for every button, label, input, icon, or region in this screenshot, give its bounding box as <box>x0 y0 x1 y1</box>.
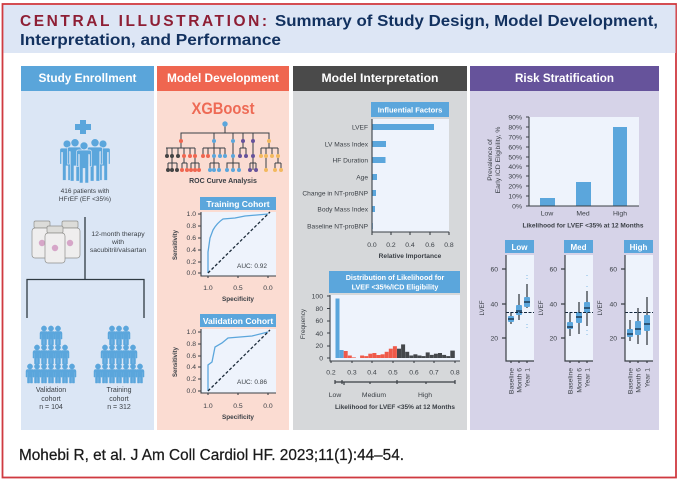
chart: influential factors: 0.8 <box>444 242 454 249</box>
chart: training cohort ROC: 0.5 <box>233 285 243 292</box>
chart: distribution of likelihood: Distribution of Likelihood for <box>346 273 445 282</box>
chart: distribution of likelihood: Frequency <box>300 308 307 339</box>
validation cohort label: cohort <box>41 396 61 403</box>
chart: influential factors: 0.2 <box>386 242 396 249</box>
chart: validation cohort ROC: AUC: 0.86 <box>237 379 267 386</box>
chart: prevalence of early ICD eligibility: Early ICD Eligibility, % <box>495 127 502 193</box>
chart: influential factors: LVEF <box>352 124 368 132</box>
chart: validation cohort ROC: 0.6 <box>187 353 196 360</box>
citation: Mohebi R, et al. J Am Coll Cardiol HF. 2023;11(1):44–54. <box>19 447 404 464</box>
chart: influential factors: LV Mass Index <box>325 142 369 148</box>
icon: pill bottles <box>32 221 80 263</box>
chart: medium group LVEF boxplot: 20 <box>549 336 557 342</box>
chart: distribution of likelihood: 0.3 <box>347 370 357 376</box>
XGBoost heading: XGBoost <box>192 99 255 118</box>
chart: distribution of likelihood: 0 <box>319 356 323 362</box>
chart: prevalence of early ICD eligibility: Med <box>576 210 590 218</box>
chart: influential factors: 0.4 <box>405 242 415 249</box>
title banner: Summary of Study Design, Model Development, <box>275 13 658 30</box>
chart: prevalence of early ICD eligibility: 90% <box>508 114 522 122</box>
chart: high group LVEF boxplot: 40 <box>609 302 617 308</box>
chart: validation cohort ROC: 1.0 <box>203 403 213 410</box>
chart: distribution of likelihood: 20 <box>315 343 323 350</box>
chart: high group LVEF boxplot: High <box>630 243 647 252</box>
chart: distribution of likelihood: 0.6 <box>409 370 419 376</box>
chart: distribution of likelihood: 80 <box>315 306 323 313</box>
chart: training cohort ROC: AUC: 0.92 <box>237 263 267 270</box>
icon: validation cohort people <box>26 326 76 383</box>
chart: prevalence of early ICD eligibility: 10% <box>508 194 522 200</box>
chart: medium group LVEF boxplot: Year 1 <box>584 368 592 387</box>
chart: training cohort ROC: 0.6 <box>187 235 196 242</box>
chart: low group LVEF boxplot: Month 6 <box>516 368 524 393</box>
chart: prevalence of early ICD eligibility: 50% <box>508 154 522 162</box>
chart: distribution of likelihood: 0.2 <box>326 370 336 376</box>
chart: influential factors: 0.0 <box>367 242 377 249</box>
therapy text: 12-month therapy <box>91 231 145 238</box>
chart: validation cohort ROC: 0.8 <box>187 341 196 348</box>
title banner: Interpretation, and Performance <box>20 32 281 49</box>
title banner: CENTRAL ILLUSTRATION: <box>20 13 267 30</box>
chart: low group LVEF boxplot <box>479 240 534 394</box>
chart: distribution of likelihood: 60 <box>315 318 323 325</box>
chart: low group LVEF boxplot: Baseline <box>508 368 516 394</box>
chart: training cohort ROC: 0.4 <box>187 247 196 254</box>
chart: distribution of likelihood: 0.7 <box>429 370 439 376</box>
chart: distribution of likelihood: 0.4 <box>367 370 377 376</box>
chart: low group LVEF boxplot: 20 <box>490 336 498 342</box>
chart: low group LVEF boxplot: Low <box>512 243 528 252</box>
chart: influential factors: Baseline NT-proBNP <box>307 224 369 230</box>
chart: distribution of likelihood: Low <box>329 392 341 399</box>
patient count text: 416 patients with <box>61 188 110 195</box>
chart: prevalence of early ICD eligibility: 70% <box>508 134 522 142</box>
chart: training cohort ROC: Specificity <box>222 296 254 303</box>
ROC heading: ROC Curve Analysis <box>189 178 257 185</box>
chart: validation cohort ROC: 0.0 <box>187 388 196 395</box>
chart: low group LVEF boxplot: Year 1 <box>524 368 532 387</box>
chart: prevalence of early ICD eligibility: 20% <box>508 184 522 190</box>
panel: risk stratification <box>470 66 659 430</box>
chart: validation cohort ROC: 0.5 <box>233 403 243 410</box>
chart: medium group LVEF boxplot: LVEF <box>538 300 545 316</box>
chart: influential factors: Influential Factors <box>378 106 442 114</box>
chart: prevalence of early ICD eligibility: 60% <box>508 144 522 152</box>
training cohort label: n = 312 <box>107 404 131 411</box>
chart: prevalence of early ICD eligibility: 0% <box>512 204 522 210</box>
chart: influential factors: Body Mass Index <box>317 206 369 214</box>
chart: training cohort ROC: Sensitivity <box>173 229 179 260</box>
chart: distribution of likelihood: LVEF <35%/ICD Eligibility <box>352 282 438 292</box>
chart: prevalence of early ICD eligibility: 80% <box>508 124 522 132</box>
chart: validation cohort ROC: Validation Cohort <box>203 316 273 326</box>
chart: high group LVEF boxplot: LVEF <box>597 300 604 316</box>
chart: training cohort ROC: 0.0 <box>187 270 196 277</box>
training cohort label: cohort <box>109 396 129 403</box>
validation cohort label <box>36 387 66 411</box>
chart: prevalence of early ICD eligibility: Likelihood for LVEF <35% at 12 Months <box>522 222 644 230</box>
chart: validation cohort ROC: Specificity <box>222 414 254 421</box>
panel: model interpretation <box>293 66 467 430</box>
chart: training cohort ROC <box>173 197 276 303</box>
chart: training cohort ROC: 0.0 <box>263 285 273 292</box>
chart: prevalence of early ICD eligibility <box>487 114 644 230</box>
chart: validation cohort ROC: Sensitivity <box>173 346 179 377</box>
patient count text <box>59 188 111 203</box>
panel: model development: Model Development <box>167 71 279 85</box>
panel: study enrollment: Study Enrollment <box>38 71 136 85</box>
chart: distribution of likelihood: Likelihood for LVEF <35% at 12 Months <box>335 405 456 411</box>
chart: influential factors: 0.6 <box>425 242 435 249</box>
chart: medium group LVEF boxplot: Med <box>570 243 587 252</box>
icon: patient group <box>60 139 110 183</box>
chart: high group LVEF boxplot: Baseline <box>628 368 634 394</box>
chart: influential factors: HF Duration <box>332 158 368 164</box>
chart: distribution of likelihood: Medium <box>362 392 386 399</box>
chart: high group LVEF boxplot: Year 1 <box>644 368 652 387</box>
validation cohort label: Validation <box>36 387 66 394</box>
chart: low group LVEF boxplot: 60 <box>490 266 498 274</box>
cohort split bracket <box>27 217 144 318</box>
chart: training cohort ROC: Training Cohort <box>206 199 270 209</box>
chart: medium group LVEF boxplot: Baseline <box>568 368 574 394</box>
training cohort label: Training <box>106 387 132 394</box>
chart: distribution of likelihood <box>300 271 460 411</box>
chart: validation cohort ROC: 1.0 <box>187 329 196 336</box>
icon: medical cross <box>75 120 91 134</box>
chart: distribution of likelihood: 40 <box>315 331 323 338</box>
chart: high group LVEF boxplot: Month 6 <box>636 368 642 393</box>
chart: training cohort ROC: 1.0 <box>203 285 213 292</box>
chart: prevalence of early ICD eligibility: 30% <box>508 174 522 180</box>
chart: distribution of likelihood: High <box>418 392 432 399</box>
chart: prevalence of early ICD eligibility: Low <box>541 210 553 218</box>
chart: prevalence of early ICD eligibility: Prevalence of <box>487 139 494 181</box>
chart: high group LVEF boxplot: 60 <box>609 266 617 274</box>
chart: influential factors: Relative Importance <box>379 253 442 260</box>
panel: model interpretation: Model Interpretation <box>322 71 438 85</box>
chart: high group LVEF boxplot <box>597 240 653 394</box>
chart: validation cohort ROC <box>173 314 276 421</box>
chart: distribution of likelihood: 0.5 <box>388 370 398 376</box>
chart: distribution of likelihood: 100 <box>312 294 323 300</box>
chart: distribution of likelihood: 0.8 <box>450 370 460 376</box>
chart: prevalence of early ICD eligibility: High <box>613 210 627 218</box>
chart: medium group LVEF boxplot <box>538 240 593 394</box>
therapy text: with <box>111 239 124 246</box>
therapy text <box>90 231 146 254</box>
icon: training cohort people <box>94 326 144 383</box>
chart: low group LVEF boxplot: 40 <box>490 302 498 308</box>
training cohort label <box>106 387 132 411</box>
chart: prevalence of early ICD eligibility: 40% <box>508 164 522 171</box>
panel: study enrollment <box>21 66 154 430</box>
chart: high group LVEF boxplot: 20 <box>609 336 617 342</box>
chart: validation cohort ROC: 0.2 <box>187 376 196 383</box>
chart: medium group LVEF boxplot: 60 <box>549 266 557 274</box>
chart: training cohort ROC: 0.8 <box>187 223 196 230</box>
chart: influential factors: Change in NT-proBNP <box>302 190 369 198</box>
chart: influential factors <box>302 102 454 260</box>
chart: validation cohort ROC: 0.0 <box>263 403 273 410</box>
chart: training cohort ROC: 0.2 <box>187 259 196 266</box>
chart: influential factors: Age <box>356 174 368 182</box>
therapy text: sacubitril/valsartan <box>90 247 146 254</box>
chart: validation cohort ROC: 0.4 <box>187 364 196 371</box>
validation cohort label: n = 104 <box>39 404 63 411</box>
panel: risk stratification: Risk Stratification <box>515 71 614 85</box>
chart: low group LVEF boxplot: LVEF <box>479 300 486 316</box>
chart: medium group LVEF boxplot: 40 <box>549 302 557 308</box>
patient count text: HFrEF (EF <35%) <box>59 196 111 203</box>
chart: medium group LVEF boxplot: Month 6 <box>576 368 584 393</box>
chart: training cohort ROC: 1.0 <box>187 211 196 218</box>
decision tree diagram <box>165 121 283 172</box>
panel: model development <box>157 66 289 430</box>
title banner <box>4 5 676 53</box>
